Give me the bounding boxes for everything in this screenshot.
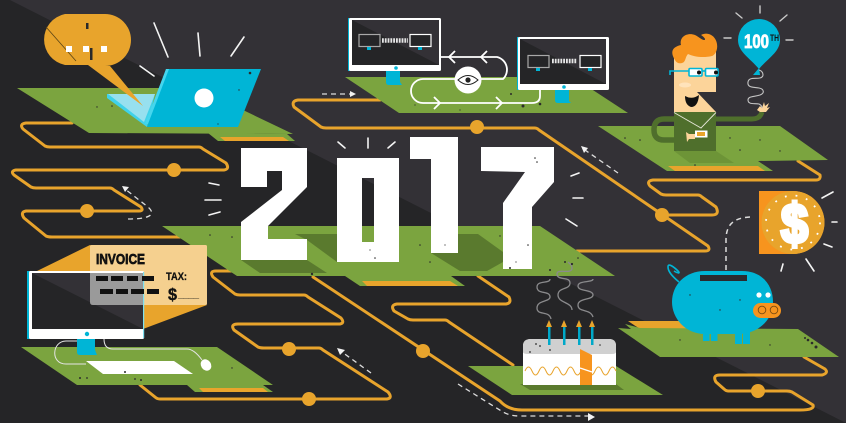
- balloon rays: [724, 6, 793, 40]
- dashed arrows: [125, 94, 750, 416]
- lanyard and badge: [674, 112, 716, 142]
- coin rays: [781, 192, 837, 271]
- digit 0: [337, 158, 399, 262]
- speech bubble: [44, 14, 143, 106]
- number shadows: [241, 234, 503, 273]
- icon: top left monitor: [348, 18, 441, 85]
- panel: person platform: [598, 126, 828, 171]
- icon: person: [654, 34, 770, 163]
- icon: birthday cake: [523, 262, 616, 385]
- icon: laptop with speech bubble: [44, 14, 261, 127]
- keyboard: [86, 361, 193, 374]
- candles: [548, 327, 594, 345]
- trace nodes: [80, 120, 765, 406]
- panel: laptop platform: [17, 88, 295, 141]
- icon: computer with invoice: $: [168, 285, 178, 304]
- icon: 100th balloon: 100: [744, 32, 769, 53]
- icon: 100th balloon: [724, 6, 793, 108]
- texture speckles: [71, 72, 817, 384]
- icon: dollar coin: [759, 191, 837, 271]
- circuit traces: [12, 100, 826, 410]
- invoice text: INVOICE: [96, 251, 145, 268]
- icon: top right monitor: [517, 37, 609, 103]
- cables: [55, 339, 202, 364]
- invoice sheet: [90, 245, 207, 305]
- steam: [537, 262, 593, 319]
- title rays: [205, 138, 583, 226]
- mouse: [198, 357, 214, 373]
- icon: dollar coin: $: [781, 192, 808, 255]
- glasses: [670, 68, 718, 76]
- laptop rays: [140, 23, 244, 76]
- icon: loop arrows with eye: [411, 51, 540, 109]
- icon: 100th balloon: TH: [770, 33, 779, 44]
- digit 7: [481, 147, 554, 269]
- icon: piggy bank: [668, 265, 781, 344]
- digit 2: [241, 148, 307, 260]
- panel: cake platform: [468, 366, 663, 395]
- panel: computer platform: [21, 347, 273, 392]
- icon: computer with invoice: [27, 245, 214, 374]
- panel: 2017 platform: [162, 226, 615, 286]
- panel: piggy bank platform: [618, 321, 839, 357]
- icon: computer with invoice: ____: [177, 289, 199, 300]
- title: 2017: [241, 137, 554, 269]
- flames: [546, 320, 595, 327]
- invoice dashes: [96, 276, 159, 294]
- arrowheads: [122, 91, 730, 421]
- panel: monitor platform top: [345, 77, 628, 113]
- icon: computer with invoice: TAX:: [166, 271, 187, 283]
- digit 1: [410, 137, 458, 253]
